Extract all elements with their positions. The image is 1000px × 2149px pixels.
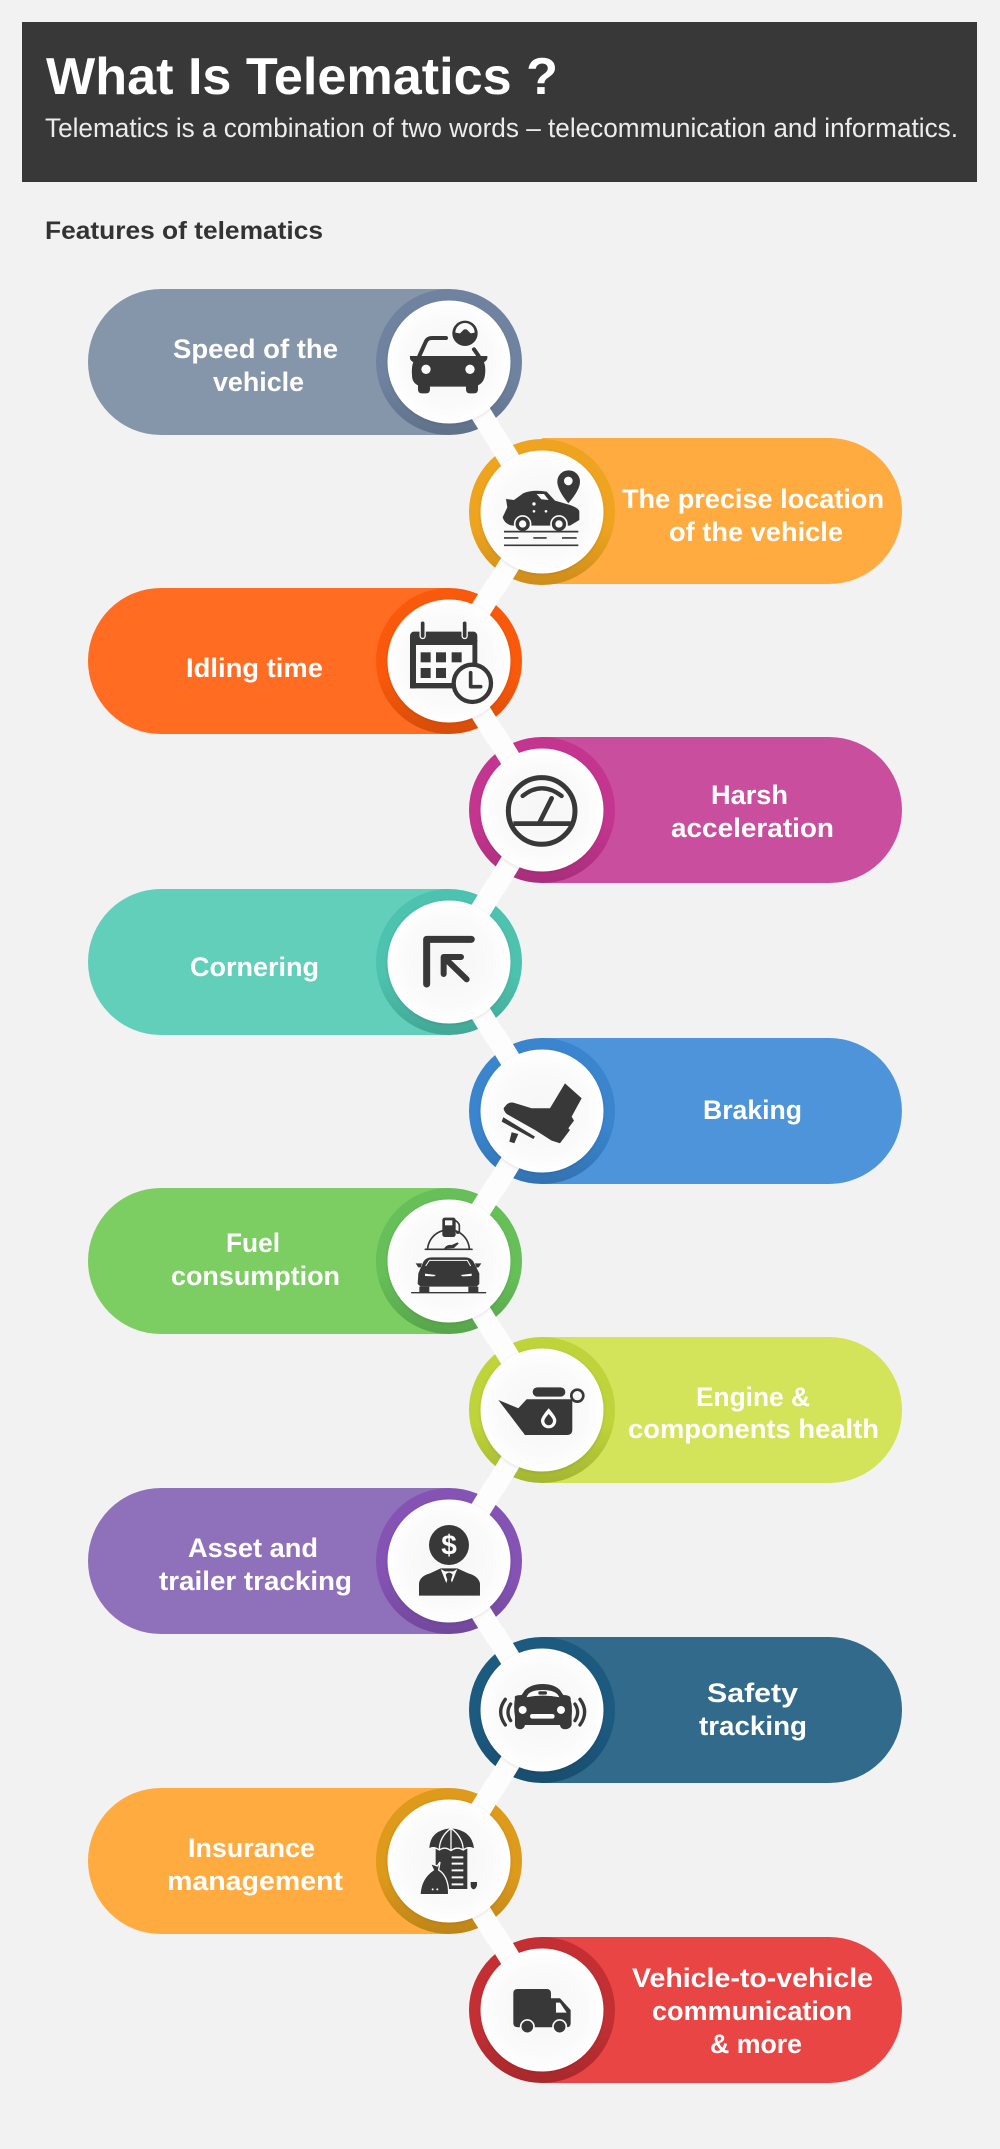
icon: oil can: [498, 1387, 583, 1435]
label: Cornering: [190, 952, 319, 982]
feature 2: precise location: [469, 435, 902, 589]
title: What Is Telematics ?: [46, 48, 558, 106]
feature 11: insurance management: [88, 1783, 522, 1938]
label: Safety: [707, 1678, 798, 1708]
label: [167, 1833, 343, 1896]
subtitle: Telematics is a combination of two words – telecommunication and informatics.: [45, 113, 958, 143]
label: trailer tracking: [159, 1566, 352, 1596]
label: management: [167, 1866, 343, 1896]
label: Engine &: [696, 1382, 810, 1412]
label: Speed of the: [173, 334, 338, 364]
label: & more: [710, 2029, 802, 2059]
feature 10: safety tracking: [469, 1633, 902, 1788]
icon: businessman with dollar head: $: [441, 1530, 457, 1561]
icon: fuel pump gauge and car: [412, 1218, 486, 1293]
label: [171, 1228, 340, 1291]
label: [173, 334, 338, 397]
icon: car with signal waves: [501, 1684, 585, 1729]
feature 5: cornering: [88, 884, 522, 1039]
label: [159, 1533, 352, 1596]
header banner: [22, 22, 977, 182]
label: Idling time: [186, 653, 323, 683]
label: tracking: [699, 1711, 807, 1741]
label: consumption: [171, 1261, 340, 1291]
label: [671, 780, 834, 843]
label: Asset and: [188, 1533, 318, 1563]
label: acceleration: [671, 813, 834, 843]
feature 7: fuel consumption: [88, 1184, 522, 1338]
icon: cornering arrow: [427, 939, 471, 984]
feature 4: harsh acceleration: [469, 733, 902, 889]
icon: car with speedometer: [410, 321, 487, 393]
feature 8: engine and components health: [469, 1333, 902, 1488]
label: of the vehicle: [669, 517, 843, 547]
icon: businessman with dollar head: [419, 1525, 480, 1596]
icon: car with location pin: [503, 470, 580, 545]
label: [628, 1382, 879, 1444]
icon: gauge dial: [508, 778, 575, 844]
label: Insurance: [188, 1833, 315, 1863]
label: vehicle: [213, 367, 304, 397]
label: The precise location: [622, 484, 884, 514]
label: communication: [652, 1996, 852, 2026]
label: Vehicle-to-vehicle: [632, 1963, 873, 1993]
label: Braking: [703, 1095, 802, 1125]
feature 1: speed of the vehicle: [88, 289, 522, 439]
label: [699, 1678, 807, 1741]
label: components health: [628, 1414, 879, 1444]
label: [632, 1963, 873, 2059]
feature 3: idling time: [88, 584, 522, 738]
icon: umbrella, document and money bag: [420, 1828, 477, 1895]
label: Harsh: [711, 780, 788, 810]
icon: foot on brake pedal: [502, 1083, 582, 1143]
label: Fuel: [226, 1228, 280, 1258]
section heading: Features of telematics: [45, 217, 323, 245]
feature 6: braking: [469, 1034, 902, 1189]
feature 12: vehicle-to-vehicle communication: [469, 1933, 902, 2083]
feature 9: asset and trailer tracking: [88, 1483, 522, 1638]
icon: calendar with clock: [410, 623, 491, 702]
label: [622, 484, 884, 547]
icon: delivery truck: [513, 1989, 571, 2033]
